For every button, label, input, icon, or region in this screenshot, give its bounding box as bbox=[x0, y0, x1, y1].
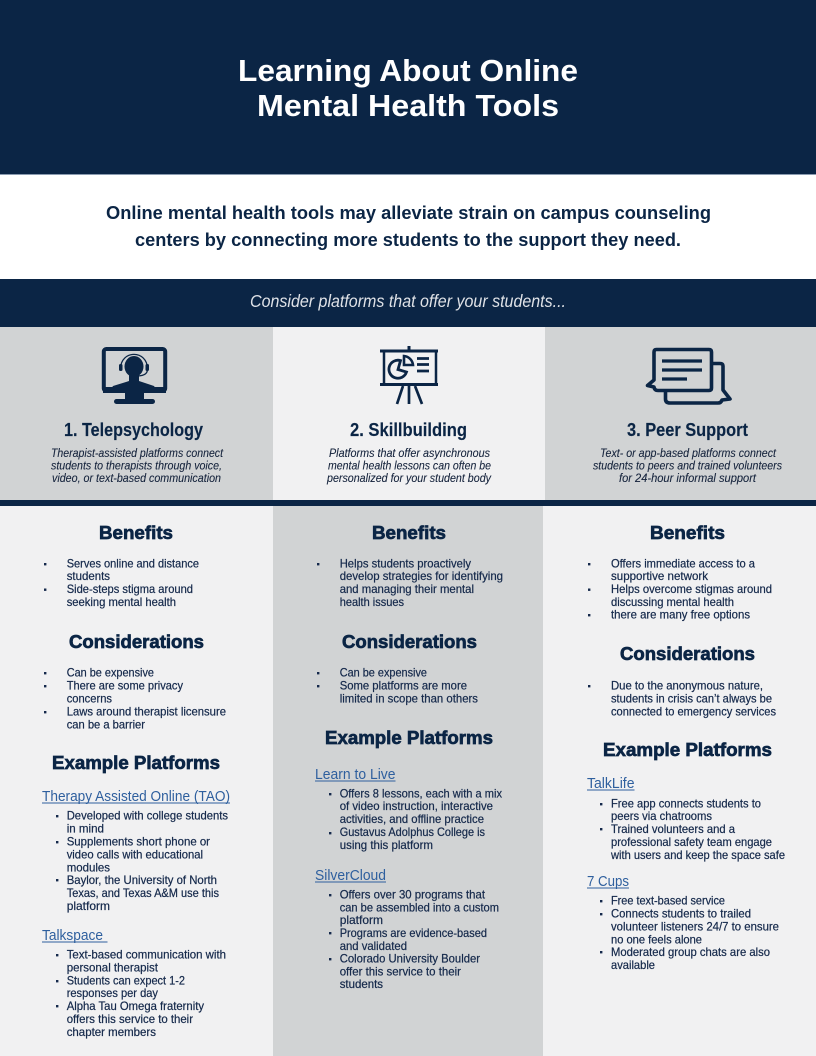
platform: 7 cups: Free text-based service bbox=[611, 894, 725, 908]
platform: learn to live: Learn to Live bbox=[315, 767, 396, 783]
platform: talklife: TalkLife bbox=[587, 776, 634, 792]
benefits list: Side-steps stigma around bbox=[67, 582, 193, 596]
benefits list bbox=[588, 556, 772, 622]
platform: silvercloud: Offers over 30 programs that bbox=[340, 888, 486, 902]
description: telepsychology: students to therapists through voice, bbox=[51, 458, 222, 472]
considerations list: connected to emergency services bbox=[611, 704, 776, 718]
considerations list bbox=[588, 678, 776, 718]
platform: silvercloud: offer this service to their bbox=[340, 964, 461, 978]
platform: talkspace: personal therapist bbox=[67, 960, 159, 974]
benefits list: there are many free options bbox=[611, 608, 750, 622]
platform: silvercloud: students bbox=[340, 977, 383, 991]
platform: talklife: professional safety team engage bbox=[611, 835, 772, 849]
considerations list bbox=[44, 666, 226, 732]
platform: talkspace: Text-based communication with bbox=[67, 948, 226, 962]
intro statement: centers by connecting more students to the support they need. bbox=[135, 230, 681, 250]
considerations list: Can be expensive bbox=[67, 666, 154, 680]
platform: talkspace bbox=[42, 928, 226, 1039]
benefits list: Offers immediate access to a bbox=[611, 556, 755, 570]
panel: telepsychology bbox=[0, 327, 273, 500]
benefits list: discussing mental health bbox=[611, 595, 734, 609]
heading: considerations: Considerations bbox=[69, 631, 204, 652]
heading: considerations: Considerations bbox=[620, 643, 755, 664]
benefits list bbox=[317, 556, 503, 609]
considerations list: can be a barrier bbox=[67, 718, 145, 732]
description: peer support: for 24-hour informal support bbox=[619, 471, 757, 485]
icon: monitor with headset person bbox=[103, 349, 166, 404]
icon: chat bubbles bbox=[648, 350, 730, 403]
platform: therapy assisted online: platform bbox=[67, 899, 110, 913]
platform: talkspace: Talkspace bbox=[42, 928, 103, 944]
benefits list: Helps overcome stigmas around bbox=[611, 582, 772, 596]
platform: learn to live bbox=[315, 767, 502, 852]
platform: talkspace: offers this service to their bbox=[67, 1012, 193, 1026]
heading: benefits: Benefits bbox=[372, 522, 446, 543]
description: skillbuilding: personalized for your student body bbox=[326, 471, 492, 485]
benefits list: develop strategies for identifying bbox=[340, 569, 503, 583]
benefits list: Helps students proactively bbox=[340, 556, 471, 570]
platform: therapy assisted online: video calls with educational bbox=[67, 848, 203, 862]
platform: therapy assisted online: Developed with college students bbox=[67, 808, 228, 822]
intro statement bbox=[0, 174, 816, 279]
platform: 7 cups: 7 Cups bbox=[587, 874, 629, 890]
column 3: peer support details bbox=[543, 506, 816, 1056]
considerations list: Due to the anonymous nature, bbox=[611, 678, 763, 692]
platform: silvercloud: SilverCloud bbox=[315, 868, 386, 884]
description: telepsychology: Therapist-assisted platforms connect bbox=[51, 446, 224, 460]
platform: 7 cups bbox=[587, 874, 779, 972]
considerations list: students in crisis can’t always be bbox=[611, 692, 772, 706]
platform: talklife: peers via chatrooms bbox=[611, 809, 712, 823]
platform: learn to live: using this platform bbox=[340, 838, 433, 852]
benefits list: Serves online and distance bbox=[67, 556, 199, 570]
platform: talklife bbox=[587, 776, 785, 862]
platform: talklife: Free app connects students to bbox=[611, 796, 761, 810]
benefits list: health issues bbox=[340, 595, 404, 609]
heading: example platforms: Example Platforms bbox=[52, 752, 220, 773]
description: telepsychology bbox=[51, 446, 224, 485]
considerations list: There are some privacy bbox=[67, 678, 183, 692]
considerations list: concerns bbox=[67, 692, 112, 706]
title banner bbox=[0, 0, 816, 174]
platform: therapy assisted online: Baylor, the University of North bbox=[67, 873, 217, 887]
heading: skillbuilding: 2. Skillbuilding bbox=[350, 420, 467, 440]
platform: learn to live: activities, and offline practice bbox=[340, 812, 484, 826]
description: peer support: Text- or app-based platforms connect bbox=[600, 446, 777, 460]
benefits list: students bbox=[67, 569, 110, 583]
platform: learn to live: of video instruction, interactive bbox=[340, 799, 493, 813]
heading: example platforms: Example Platforms bbox=[603, 739, 772, 760]
platform: 7 cups: no one feels alone bbox=[611, 932, 702, 946]
description: peer support bbox=[593, 446, 782, 485]
column 1: telepsychology details bbox=[0, 506, 273, 1056]
description: peer support: students to peers and trained volunteers bbox=[593, 458, 782, 472]
considerations list: Laws around therapist licensure bbox=[67, 704, 226, 718]
description: skillbuilding: Platforms that offer asynchronous bbox=[329, 446, 490, 460]
platform: silvercloud bbox=[315, 868, 499, 991]
icon: presentation board bbox=[380, 346, 438, 404]
heading: example platforms: Example Platforms bbox=[325, 727, 493, 748]
platform: therapy assisted online: Texas, and Texas A&M use this bbox=[67, 886, 219, 900]
platform: silvercloud: platform bbox=[340, 913, 383, 927]
platform: therapy assisted online: Supplements short phone or bbox=[67, 834, 210, 848]
considerations list: Can be expensive bbox=[340, 666, 427, 680]
column 2: skillbuilding details bbox=[273, 506, 543, 1056]
platform: talklife: Trained volunteers and a bbox=[611, 822, 735, 836]
panel: skillbuilding bbox=[273, 327, 545, 500]
benefits list: seeking mental health bbox=[67, 595, 176, 609]
heading: peer support: 3. Peer Support bbox=[627, 420, 748, 440]
consider banner: Consider platforms that offer your students... bbox=[250, 291, 566, 311]
heading: benefits: Benefits bbox=[650, 522, 725, 543]
platform: learn to live: Offers 8 lessons, each with a mix bbox=[340, 786, 502, 800]
description: skillbuilding bbox=[326, 446, 492, 485]
platform: talkspace: responses per day bbox=[67, 986, 158, 1000]
heading: considerations: Considerations bbox=[342, 631, 477, 652]
platform: 7 cups: Connects students to trailed bbox=[611, 906, 751, 920]
considerations list: limited in scope than others bbox=[340, 692, 478, 706]
consider banner bbox=[0, 279, 816, 327]
platform: talkspace: Students can expect 1-2 bbox=[67, 974, 185, 988]
platform: talkspace: chapter members bbox=[67, 1025, 156, 1039]
platform: talkspace: Alpha Tau Omega fraternity bbox=[67, 999, 204, 1013]
platform: learn to live: Gustavus Adolphus College is bbox=[340, 825, 485, 839]
considerations list: Some platforms are more bbox=[340, 678, 467, 692]
heading: benefits: Benefits bbox=[99, 522, 173, 543]
platform: therapy assisted online: Therapy Assisted Online (TAO) bbox=[42, 789, 230, 805]
benefits list: supportive network bbox=[611, 569, 709, 583]
intro statement: Online mental health tools may alleviate strain on campus counseling bbox=[106, 203, 711, 223]
platform: silvercloud: Programs are evidence-based bbox=[340, 926, 487, 940]
platform: therapy assisted online bbox=[42, 789, 230, 913]
platform: 7 cups: volunteer listeners 24/7 to ensure bbox=[611, 920, 779, 934]
title banner: Mental Health Tools bbox=[257, 88, 559, 123]
considerations list bbox=[317, 666, 478, 706]
platform: talklife: with users and keep the space safe bbox=[610, 848, 785, 862]
platform: therapy assisted online: in mind bbox=[67, 822, 104, 836]
heading: telepsychology: 1. Telepsychology bbox=[64, 420, 203, 440]
benefits list bbox=[44, 556, 199, 609]
benefits list: and managing their mental bbox=[340, 582, 474, 596]
platform: silvercloud: Colorado University Boulder bbox=[340, 952, 480, 966]
panel: peer support bbox=[545, 327, 816, 500]
description: skillbuilding: mental health lessons can often be bbox=[328, 458, 491, 472]
platform: therapy assisted online: modules bbox=[67, 860, 110, 874]
platform: 7 cups: Moderated group chats are also bbox=[611, 945, 770, 959]
title banner: Learning About Online bbox=[238, 53, 578, 88]
platform: silvercloud: can be assembled into a custom bbox=[340, 900, 499, 914]
description: telepsychology: video, or text-based communication bbox=[52, 471, 221, 485]
platform: 7 cups: available bbox=[611, 958, 655, 972]
platform: silvercloud: and validated bbox=[340, 939, 407, 953]
